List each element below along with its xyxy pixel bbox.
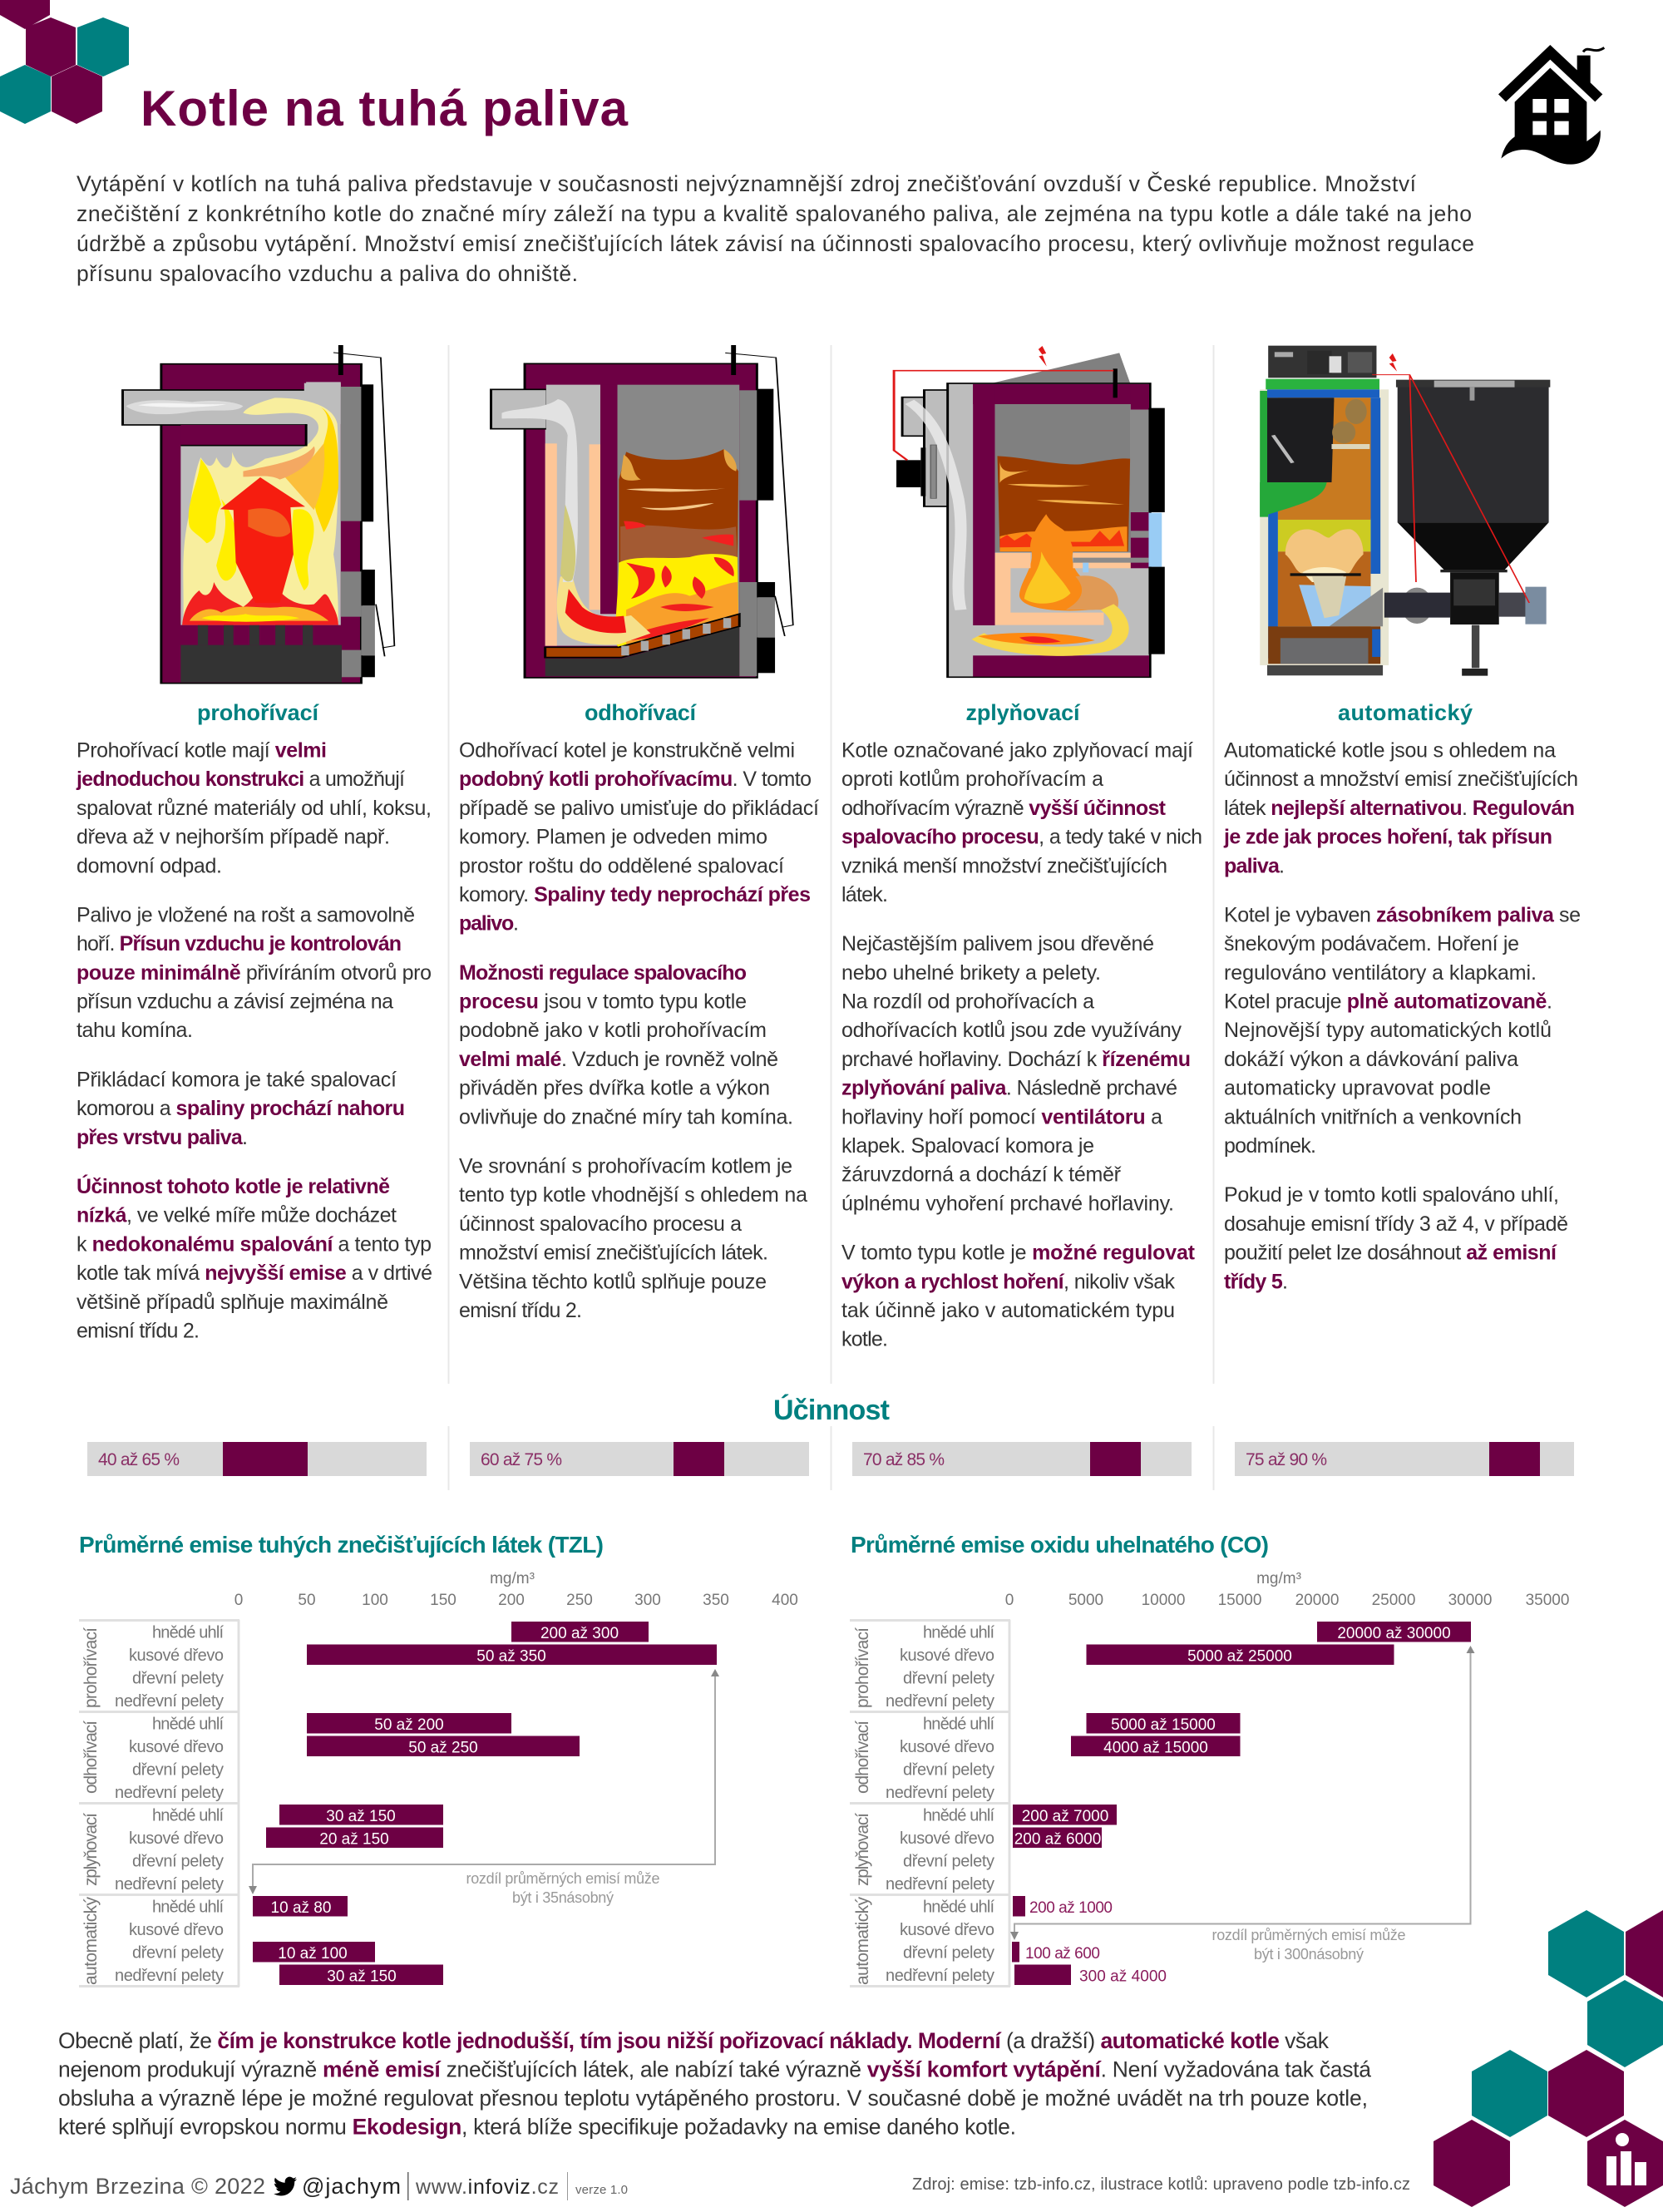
text block: zplyňovací description: spalovacího procesu, a tedy také v nich bbox=[841, 825, 1202, 848]
text block: prohořívací description: nízká, ve velké míře může docházet bbox=[76, 1204, 397, 1227]
row labels: nedřevní pelety bbox=[886, 1692, 994, 1711]
bar values: 200 až 7000 bbox=[1022, 1808, 1108, 1825]
axis ticks: 350 bbox=[703, 1592, 729, 1609]
axis ticks: 50 bbox=[298, 1592, 316, 1609]
footer: author: Jáchym Brzezina © 2022 bbox=[10, 2174, 265, 2199]
axis ticks: 200 bbox=[498, 1592, 525, 1609]
text block: zplyňovací description: vzniká menší množství znečišťujících bbox=[841, 854, 1167, 877]
text block: prohořívací description: Prohořívací kotle mají velmi bbox=[76, 738, 327, 762]
axis ticks: 400 bbox=[772, 1592, 798, 1609]
summary text: obsluha a výrazně lépe je možné regulovat přesnou teplotu vytápěného prostoru. V současné době je možné uvádět na trh pouze kotle, bbox=[58, 2086, 1368, 2111]
summary text: Obecně platí, že čím je konstrukce kotle jednodušší, tím jsou nižší pořizovací náklady. Moderní (a dražší) automatické kotle však bbox=[58, 2028, 1330, 2053]
text block: zplyňovací description: hořlaviny hoří pomocí ventilátoru a bbox=[841, 1105, 1162, 1128]
text block: odhořívací description: emisní třídu 2. bbox=[459, 1299, 582, 1322]
text block: prohořívací description: dřeva až v nejhorším případě např. bbox=[76, 825, 390, 848]
group labels: automatický bbox=[81, 1896, 101, 1985]
group labels: prohořívací bbox=[81, 1627, 101, 1708]
text block: odhořívací description: Odhořívací kotel je konstrukčně velmi bbox=[459, 738, 795, 762]
text block: prohořívací description: Účinnost tohoto kotle je relativně bbox=[76, 1173, 390, 1198]
text block: automatický description: dokáží výkon a dávkování paliva bbox=[1224, 1048, 1518, 1071]
text block: automatický description: aktuálních vnitřních a venkovních bbox=[1224, 1105, 1522, 1128]
column: automatický bbox=[1223, 700, 1581, 1293]
text block: prohořívací description: Palivo je vložené na rošt a samovolně bbox=[76, 903, 415, 926]
group labels: odhořívací bbox=[81, 1721, 101, 1794]
bar values: 5000 až 25000 bbox=[1187, 1648, 1292, 1665]
row labels: hnědé uhlí bbox=[923, 1715, 994, 1733]
text block: zplyňovací description: úplnému vyhoření prchavé hořlaviny. bbox=[841, 1192, 1174, 1215]
row labels: dřevní pelety bbox=[132, 1853, 224, 1871]
row labels bbox=[886, 1623, 994, 1985]
text block: prohořívací description: pouze minimálně přivíráním otvorů pro bbox=[76, 961, 432, 985]
footer: sources: Zdroj: emise: tzb-info.cz, ilustrace kotlů: upraveno podle tzb-info.cz bbox=[912, 2175, 1410, 2194]
bar: odhořívací efficiency bbox=[470, 1442, 809, 1476]
heading: prohořívací: prohořívací bbox=[197, 700, 319, 725]
column: zplyňovací bbox=[841, 700, 1202, 1351]
bar values: 10 až 80 bbox=[271, 1899, 331, 1917]
text block: zplyňovací description bbox=[841, 738, 1202, 1351]
row labels: dřevní pelety bbox=[132, 1670, 224, 1688]
row labels: hnědé uhlí bbox=[923, 1898, 994, 1916]
row labels: kusové dřevo bbox=[900, 1647, 994, 1665]
text block: odhořívací description: palivo. bbox=[459, 912, 519, 936]
group labels: automatický bbox=[853, 1896, 872, 1985]
text block: zplyňovací description: nebo uhelné brikety a pelety. bbox=[841, 961, 1101, 985]
text block: odhořívací description bbox=[459, 738, 819, 1322]
text block: automatický description: Kotel pracuje plně automatizovaně. bbox=[1224, 990, 1552, 1013]
text block: zplyňovací description: výkon a rychlost hoření, nikoliv však bbox=[841, 1270, 1176, 1293]
text block: odhořívací description: procesu jsou v tomto typu kotle bbox=[459, 990, 747, 1013]
text block: prohořívací description: hoří. Přísun vzduchu je kontrolován bbox=[76, 932, 402, 955]
axis ticks: 0 bbox=[1005, 1592, 1014, 1609]
axis ticks: 35000 bbox=[1526, 1592, 1569, 1609]
row labels: dřevní pelety bbox=[132, 1761, 224, 1780]
callout: být i 35násobný bbox=[512, 1889, 614, 1906]
row labels bbox=[115, 1623, 224, 1985]
text block: zplyňovací description: kotle. bbox=[841, 1328, 888, 1351]
axis ticks: 0 bbox=[234, 1592, 243, 1609]
bar values: 50 až 200 bbox=[374, 1716, 444, 1734]
text block: prohořívací description: většině případů splňuje maximálně bbox=[76, 1291, 388, 1314]
bar: odhořívací efficiency: 60 až 75 % bbox=[481, 1450, 562, 1469]
group labels: prohořívací bbox=[853, 1627, 872, 1708]
illustration: odhořívací boiler bbox=[491, 345, 793, 678]
group labels: zplyňovací bbox=[853, 1813, 872, 1886]
bar values: 4000 až 15000 bbox=[1103, 1740, 1208, 1756]
hexagon cluster: top left bbox=[0, 0, 129, 124]
callout: být i 300násobný bbox=[1254, 1946, 1364, 1963]
group labels: zplyňovací bbox=[81, 1813, 101, 1886]
efficiency bars bbox=[87, 1442, 1574, 1476]
text block: odhořívací description: Většina těchto kotlů splňuje pouze bbox=[459, 1270, 767, 1293]
text block: odhořívací description: podobný kotli prohořívacímu. V tomto bbox=[459, 768, 812, 791]
text block: prohořívací description: domovní odpad. bbox=[76, 854, 222, 877]
axis ticks: 150 bbox=[430, 1592, 456, 1609]
axis ticks: 20000 bbox=[1295, 1592, 1339, 1609]
text block: prohořívací description: přes vrstvu paliva. bbox=[76, 1126, 248, 1149]
text block: prohořívací description: jednoduchou konstrukci a umožňují bbox=[76, 768, 405, 791]
text block: zplyňovací description: prchavé hořlaviny. Dochází k řízenému bbox=[841, 1048, 1191, 1071]
axis ticks: 5000 bbox=[1068, 1592, 1103, 1609]
row labels: nedřevní pelety bbox=[886, 1967, 994, 1985]
text block: odhořívací description: případě se palivo umisťuje do přikládací bbox=[459, 797, 819, 820]
row labels: kusové dřevo bbox=[129, 1921, 224, 1939]
row labels: kusové dřevo bbox=[900, 1829, 994, 1848]
row labels: hnědé uhlí bbox=[923, 1806, 994, 1824]
text block: automatický description: regulováno ventilátory a klapkami. bbox=[1224, 961, 1537, 985]
text block: prohořívací description: komorou a spaliny prochází nahoru bbox=[76, 1097, 405, 1120]
bar values: 200 až 6000 bbox=[1014, 1831, 1101, 1848]
text block: automatický description: látek nejlepší alternativou. Regulován bbox=[1224, 797, 1575, 820]
intro text: Vytápění v kotlích na tuhá paliva představuje v současnosti nejvýznamnější zdroj znečišťování ovzduší v České republice. Množství bbox=[76, 171, 1417, 196]
row labels: hnědé uhlí bbox=[152, 1806, 224, 1824]
text block: prohořívací description: emisní třídu 2. bbox=[76, 1319, 200, 1342]
row labels: dřevní pelety bbox=[132, 1944, 224, 1963]
bar chart: CO emissions: mg/m³ bbox=[1256, 1570, 1301, 1587]
intro text bbox=[76, 171, 1474, 286]
bar values: 10 až 100 bbox=[278, 1945, 348, 1963]
bar values: 50 až 250 bbox=[408, 1740, 478, 1756]
heading: automatický: automatický bbox=[1338, 700, 1473, 725]
text block: automatický description: Automatické kotle jsou s ohledem na bbox=[1224, 738, 1556, 762]
intro text: údržbě a způsobu vytápění. Množství emisí znečišťujících látek závisí na účinnosti spalovacího procesu, který ovlivňuje možnost regulace bbox=[76, 231, 1474, 256]
text block: odhořívací description: Ve srovnání s prohořívacím kotlem je bbox=[459, 1154, 792, 1178]
bar: automatický efficiency: 75 až 90 % bbox=[1246, 1450, 1327, 1469]
heading: odhořívací: odhořívací bbox=[585, 700, 697, 725]
row labels: kusové dřevo bbox=[129, 1738, 224, 1756]
text block: zplyňovací description: zplyňování paliva. Následně prchavé bbox=[841, 1076, 1177, 1099]
text block: automatický description: šnekovým podávačem. Hoření je bbox=[1224, 932, 1519, 955]
bar: automatický efficiency bbox=[1235, 1442, 1574, 1476]
row labels: dřevní pelety bbox=[903, 1853, 994, 1871]
text block: odhořívací description: přiváděn přes dvířka kotle a výkon bbox=[459, 1076, 770, 1099]
text block: automatický description: automaticky upravovat podle bbox=[1224, 1076, 1491, 1099]
row labels: nedřevní pelety bbox=[115, 1967, 224, 1985]
text block: odhořívací description: ovlivňuje do značné míry tah komína. bbox=[459, 1105, 793, 1128]
column: odhořívací bbox=[459, 700, 819, 1322]
text block: automatický description: Nejnovější typy automatických kotlů bbox=[1224, 1019, 1552, 1042]
row labels: dřevní pelety bbox=[903, 1761, 994, 1780]
text block: zplyňovací description: Na rozdíl od prohořívacích a bbox=[841, 990, 1094, 1013]
text block: prohořívací description: kotle tak mívá nejvyšší emise a v drtivé bbox=[76, 1262, 432, 1285]
row labels: kusové dřevo bbox=[129, 1647, 224, 1665]
axis ticks: 100 bbox=[362, 1592, 388, 1609]
bar: prohořívací efficiency: 40 až 65 % bbox=[98, 1450, 180, 1469]
text block: zplyňovací description: V tomto typu kotle je možné regulovat bbox=[841, 1241, 1196, 1264]
bar values: 30 až 150 bbox=[326, 1808, 396, 1825]
bar values bbox=[1014, 1625, 1451, 1986]
text block: automatický description: je zde jak proces hoření, tak přísun bbox=[1223, 825, 1552, 848]
arrow: difference bbox=[1010, 1646, 1475, 1940]
text block: automatický description: paliva. bbox=[1224, 854, 1285, 877]
axis ticks bbox=[234, 1592, 798, 1609]
text block: zplyňovací description: Nejčastějším palivem jsou dřevěné bbox=[841, 932, 1154, 955]
callout: rozdíl průměrných emisí může bbox=[466, 1870, 660, 1887]
row labels: hnědé uhlí bbox=[923, 1623, 994, 1642]
row labels: nedřevní pelety bbox=[115, 1692, 224, 1711]
bar chart: TZL emissions bbox=[79, 1570, 798, 1987]
text block: zplyňovací description: klapek. Spalovací komora je bbox=[841, 1134, 1094, 1158]
bar values: 200 až 300 bbox=[540, 1625, 619, 1642]
bar values: 50 až 350 bbox=[476, 1648, 546, 1665]
intro text: přísunu spalovacího vzduchu a paliva do ohniště. bbox=[76, 261, 578, 286]
summary text: nejenom produkují výrazně méně emisí znečišťujících látek, ale nabízí také výrazně vyšší komfort vytápění. Není vyžadována tak častá bbox=[58, 2057, 1371, 2082]
row labels: hnědé uhlí bbox=[152, 1715, 224, 1733]
bar values: 300 až 4000 bbox=[1079, 1968, 1167, 1986]
axis ticks: 30000 bbox=[1448, 1592, 1492, 1609]
text block: zplyňovací description: žáruvzdorná a dochází k téměř bbox=[841, 1163, 1122, 1186]
bar: prohořívací efficiency bbox=[87, 1442, 427, 1476]
illustration: zplyňovací boiler bbox=[894, 346, 1165, 677]
footer: author: verze 1.0 bbox=[575, 2183, 628, 2197]
row labels: kusové dřevo bbox=[129, 1829, 224, 1848]
text block: zplyňovací description: odhořívacím výrazně vyšší účinnost bbox=[841, 797, 1167, 820]
bar chart: TZL emissions: mg/m³ bbox=[490, 1570, 535, 1587]
row labels: nedřevní pelety bbox=[886, 1875, 994, 1894]
text block: zplyňovací description: tak účinně jako v automatickém typu bbox=[841, 1299, 1175, 1322]
footer: author: @jachym bbox=[302, 2174, 401, 2199]
text block: automatický description: třídy 5. bbox=[1224, 1270, 1288, 1293]
chart heading: TZL: Průměrné emise tuhých znečišťujících látek (TZL) bbox=[79, 1532, 604, 1558]
row labels: dřevní pelety bbox=[903, 1944, 994, 1963]
footer: author bbox=[10, 2172, 628, 2200]
text block: zplyňovací description: látek. bbox=[841, 883, 888, 906]
callout bbox=[1212, 1927, 1405, 1963]
group labels: odhořívací bbox=[853, 1721, 872, 1794]
text block: zplyňovací description: Kotle označované jako zplyňovací mají bbox=[841, 738, 1193, 762]
text block: odhořívací description: velmi malé. Vzduch je rovněž volně bbox=[459, 1048, 778, 1071]
axis ticks: 25000 bbox=[1372, 1592, 1415, 1609]
bar values: 20 až 150 bbox=[319, 1831, 389, 1848]
bar values: 100 až 600 bbox=[1025, 1945, 1100, 1963]
row labels: dřevní pelety bbox=[903, 1670, 994, 1688]
callout bbox=[466, 1870, 660, 1906]
axis ticks: 15000 bbox=[1218, 1592, 1261, 1609]
axis ticks: 250 bbox=[566, 1592, 593, 1609]
title: Kotle na tuhá paliva bbox=[141, 81, 629, 136]
illustration: prohořívací boiler bbox=[123, 345, 394, 684]
bar values: 200 až 1000 bbox=[1029, 1899, 1113, 1917]
row labels: nedřevní pelety bbox=[115, 1875, 224, 1894]
axis ticks: 10000 bbox=[1142, 1592, 1185, 1609]
icon: chart person bbox=[1606, 2133, 1646, 2185]
text block: odhořívací description: tento typ kotle vhodnější s ohledem na bbox=[459, 1183, 807, 1207]
bar values: 30 až 150 bbox=[327, 1968, 397, 1986]
text block: zplyňovací description: oproti kotlům prohořívacím a bbox=[841, 768, 1103, 791]
heading: zplyňovací: zplyňovací bbox=[966, 700, 1081, 725]
bar values: 20000 až 30000 bbox=[1337, 1625, 1451, 1642]
text block: automatický description bbox=[1223, 738, 1581, 1293]
bar values: 5000 až 15000 bbox=[1111, 1716, 1216, 1734]
text block: zplyňovací description: odhořívacích kotlů jsou zde využívány bbox=[841, 1019, 1182, 1042]
bar: zplyňovací efficiency bbox=[852, 1442, 1192, 1476]
axis ticks bbox=[1005, 1592, 1569, 1609]
text block: prohořívací description: spalovat různé materiály od uhlí, koksu, bbox=[76, 797, 432, 820]
hexagon cluster: bottom right bbox=[1434, 1910, 1663, 2207]
chart heading: CO: Průměrné emise oxidu uhelnatého (CO) bbox=[851, 1532, 1269, 1558]
text block: odhořívací description: prostor roštu do oddělené spalovací bbox=[459, 854, 784, 877]
text block: prohořívací description: tahu komína. bbox=[76, 1019, 193, 1042]
icon: house with smoke bbox=[1498, 45, 1604, 165]
bars bbox=[253, 1622, 717, 1985]
bar: zplyňovací efficiency: 70 až 85 % bbox=[863, 1450, 945, 1469]
arrow: difference bbox=[249, 1669, 719, 1894]
heading: Účinnost: Účinnost bbox=[773, 1395, 890, 1426]
text block: prohořívací description bbox=[76, 738, 432, 1342]
row labels: nedřevní pelety bbox=[886, 1784, 994, 1802]
axis ticks: 300 bbox=[634, 1592, 661, 1609]
text block: automatický description: Kotel je vybaven zásobníkem paliva se bbox=[1224, 903, 1581, 926]
group labels bbox=[853, 1627, 872, 1985]
bar values bbox=[271, 1625, 619, 1986]
summary text: které splňují evropskou normu Ekodesign, která blíže specifikuje požadavky na emise daného kotle. bbox=[58, 2114, 1016, 2139]
text block: odhořívací description: množství emisí znečišťujících látek. bbox=[459, 1241, 768, 1264]
text block: odhořívací description: komory. Spaliny tedy neprochází přes bbox=[459, 883, 811, 906]
text block: automatický description: účinnost a množství emisí znečišťujících bbox=[1224, 768, 1578, 791]
footer: author: www.infoviz.cz bbox=[415, 2175, 559, 2199]
illustration: automatický boiler bbox=[1260, 346, 1550, 676]
row labels: kusové dřevo bbox=[900, 1921, 994, 1939]
column: prohořívací bbox=[76, 700, 432, 1342]
group labels bbox=[81, 1627, 101, 1985]
text block: prohořívací description: přísun vzduchu a závisí zejména na bbox=[76, 990, 393, 1013]
text block: prohořívací description: k nedokonalému spalování a tento typ bbox=[76, 1232, 432, 1256]
text block: automatický description: použití pelet lze dosáhnout až emisní bbox=[1224, 1241, 1557, 1264]
text block: automatický description: dosahuje emisní třídy 3 až 4, v případě bbox=[1224, 1212, 1568, 1236]
intro text: znečištění z konkrétního kotle do značné míry záleží na typu a kvalitě spalovaného paliva, ale zejména na typu kotle a dále také na jeho bbox=[76, 201, 1472, 226]
text block: odhořívací description: Možnosti regulace spalovacího bbox=[459, 961, 747, 985]
row labels: hnědé uhlí bbox=[152, 1898, 224, 1916]
text block: automatický description: Pokud je v tomto kotli spalováno uhlí, bbox=[1224, 1183, 1559, 1207]
callout: rozdíl průměrných emisí může bbox=[1212, 1927, 1405, 1943]
text block: odhořívací description: komory. Plamen je odveden mimo bbox=[459, 825, 767, 848]
row labels: nedřevní pelety bbox=[115, 1784, 224, 1802]
text block: prohořívací description: Přikládací komora je také spalovací bbox=[76, 1068, 397, 1091]
text block: automatický description: podmínek. bbox=[1224, 1134, 1316, 1158]
row labels: kusové dřevo bbox=[900, 1738, 994, 1756]
icon: twitter bird bbox=[274, 2177, 297, 2195]
bar chart: CO emissions bbox=[850, 1570, 1569, 1987]
text block: odhořívací description: podobně jako v kotli prohořívacím bbox=[459, 1019, 767, 1042]
summary text bbox=[58, 2028, 1371, 2139]
text block: odhořívací description: účinnost spalovacího procesu a bbox=[459, 1212, 742, 1236]
bars bbox=[1012, 1622, 1471, 1985]
row labels: hnědé uhlí bbox=[152, 1623, 224, 1642]
